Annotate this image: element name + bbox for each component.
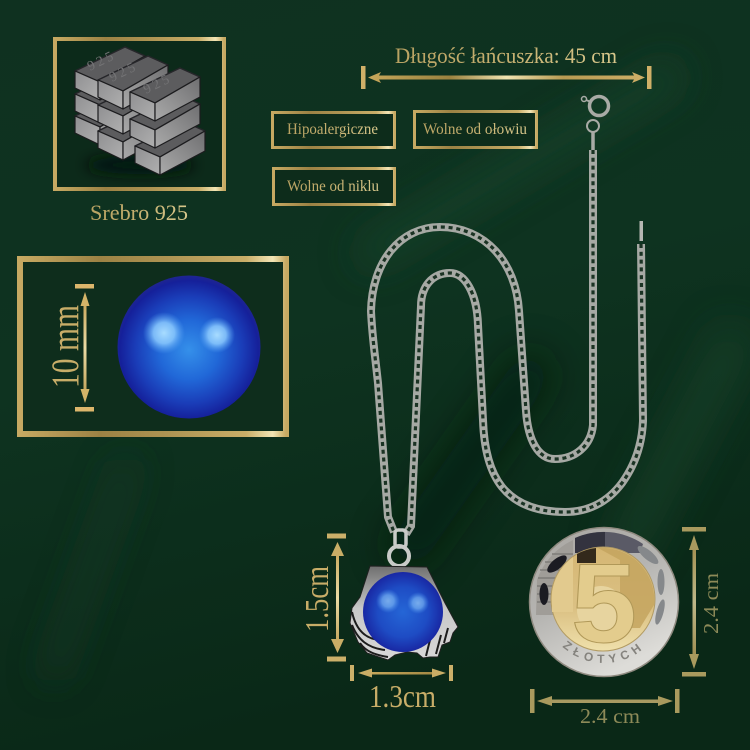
pearl [363, 572, 443, 652]
icon: stack of silver bars [75, 47, 205, 175]
badge: lead free [414, 112, 536, 148]
badge: nickel free [274, 168, 394, 204]
ring relief panels [575, 532, 643, 553]
oak leaves [540, 552, 569, 605]
label: Srebro 925: Srebro 925 [90, 200, 188, 225]
coin: 5 zlotych [528, 526, 680, 678]
icon: stack of silver bars: 925 [141, 71, 175, 98]
photo panel: silver 925 bars [55, 39, 224, 189]
icon: stack of silver bars: 925 [85, 48, 119, 75]
dimension: chain length [361, 43, 652, 89]
chain [371, 96, 643, 534]
chain strand to pendant [406, 221, 643, 534]
dimension: pendant height 1.5 cm [299, 534, 346, 662]
bail [389, 530, 409, 566]
dimension: pendant width 1.3 cm: 1.3cm [369, 678, 436, 714]
dimension: coin width 2.4 cm: 2.4 cm [580, 704, 640, 728]
badge: hypoallergenic [272, 112, 394, 148]
chain strand from clasp [371, 150, 593, 532]
dimension: 10 mm: 10 mm [44, 305, 87, 388]
pendant: pearl held by hands [350, 530, 458, 660]
hands [350, 566, 458, 660]
dimension: pendant width 1.3 cm [350, 665, 453, 714]
pearl [118, 276, 260, 418]
badge: lead free: Wolne od ołowiu [423, 121, 527, 138]
panel: pearl 10 mm [20, 259, 286, 434]
dimension: pendant height 1.5 cm: 1.5cm [299, 566, 336, 632]
finger details [352, 612, 448, 657]
badge: hypoallergenic: Hipoalergiczne [287, 121, 378, 138]
dimension: 10 mm [44, 284, 94, 412]
heading: chain length: Długość łańcuszka: 45 cm [395, 43, 617, 68]
coin legend: ZŁOTYCH [562, 640, 642, 663]
dimension: coin height 2.4 cm [682, 527, 723, 676]
outer ring [530, 528, 678, 676]
dimension: coin width 2.4 cm [530, 689, 680, 728]
icon: stack of silver bars: 925 [107, 59, 141, 86]
numeral 5: 5 [571, 541, 637, 666]
gold frame [55, 39, 224, 189]
golden centre [551, 547, 655, 651]
dimension: coin height 2.4 cm: 2.4 cm [699, 573, 723, 634]
badge: nickel free: Wolne od niklu [287, 178, 379, 195]
clasp [582, 96, 608, 150]
